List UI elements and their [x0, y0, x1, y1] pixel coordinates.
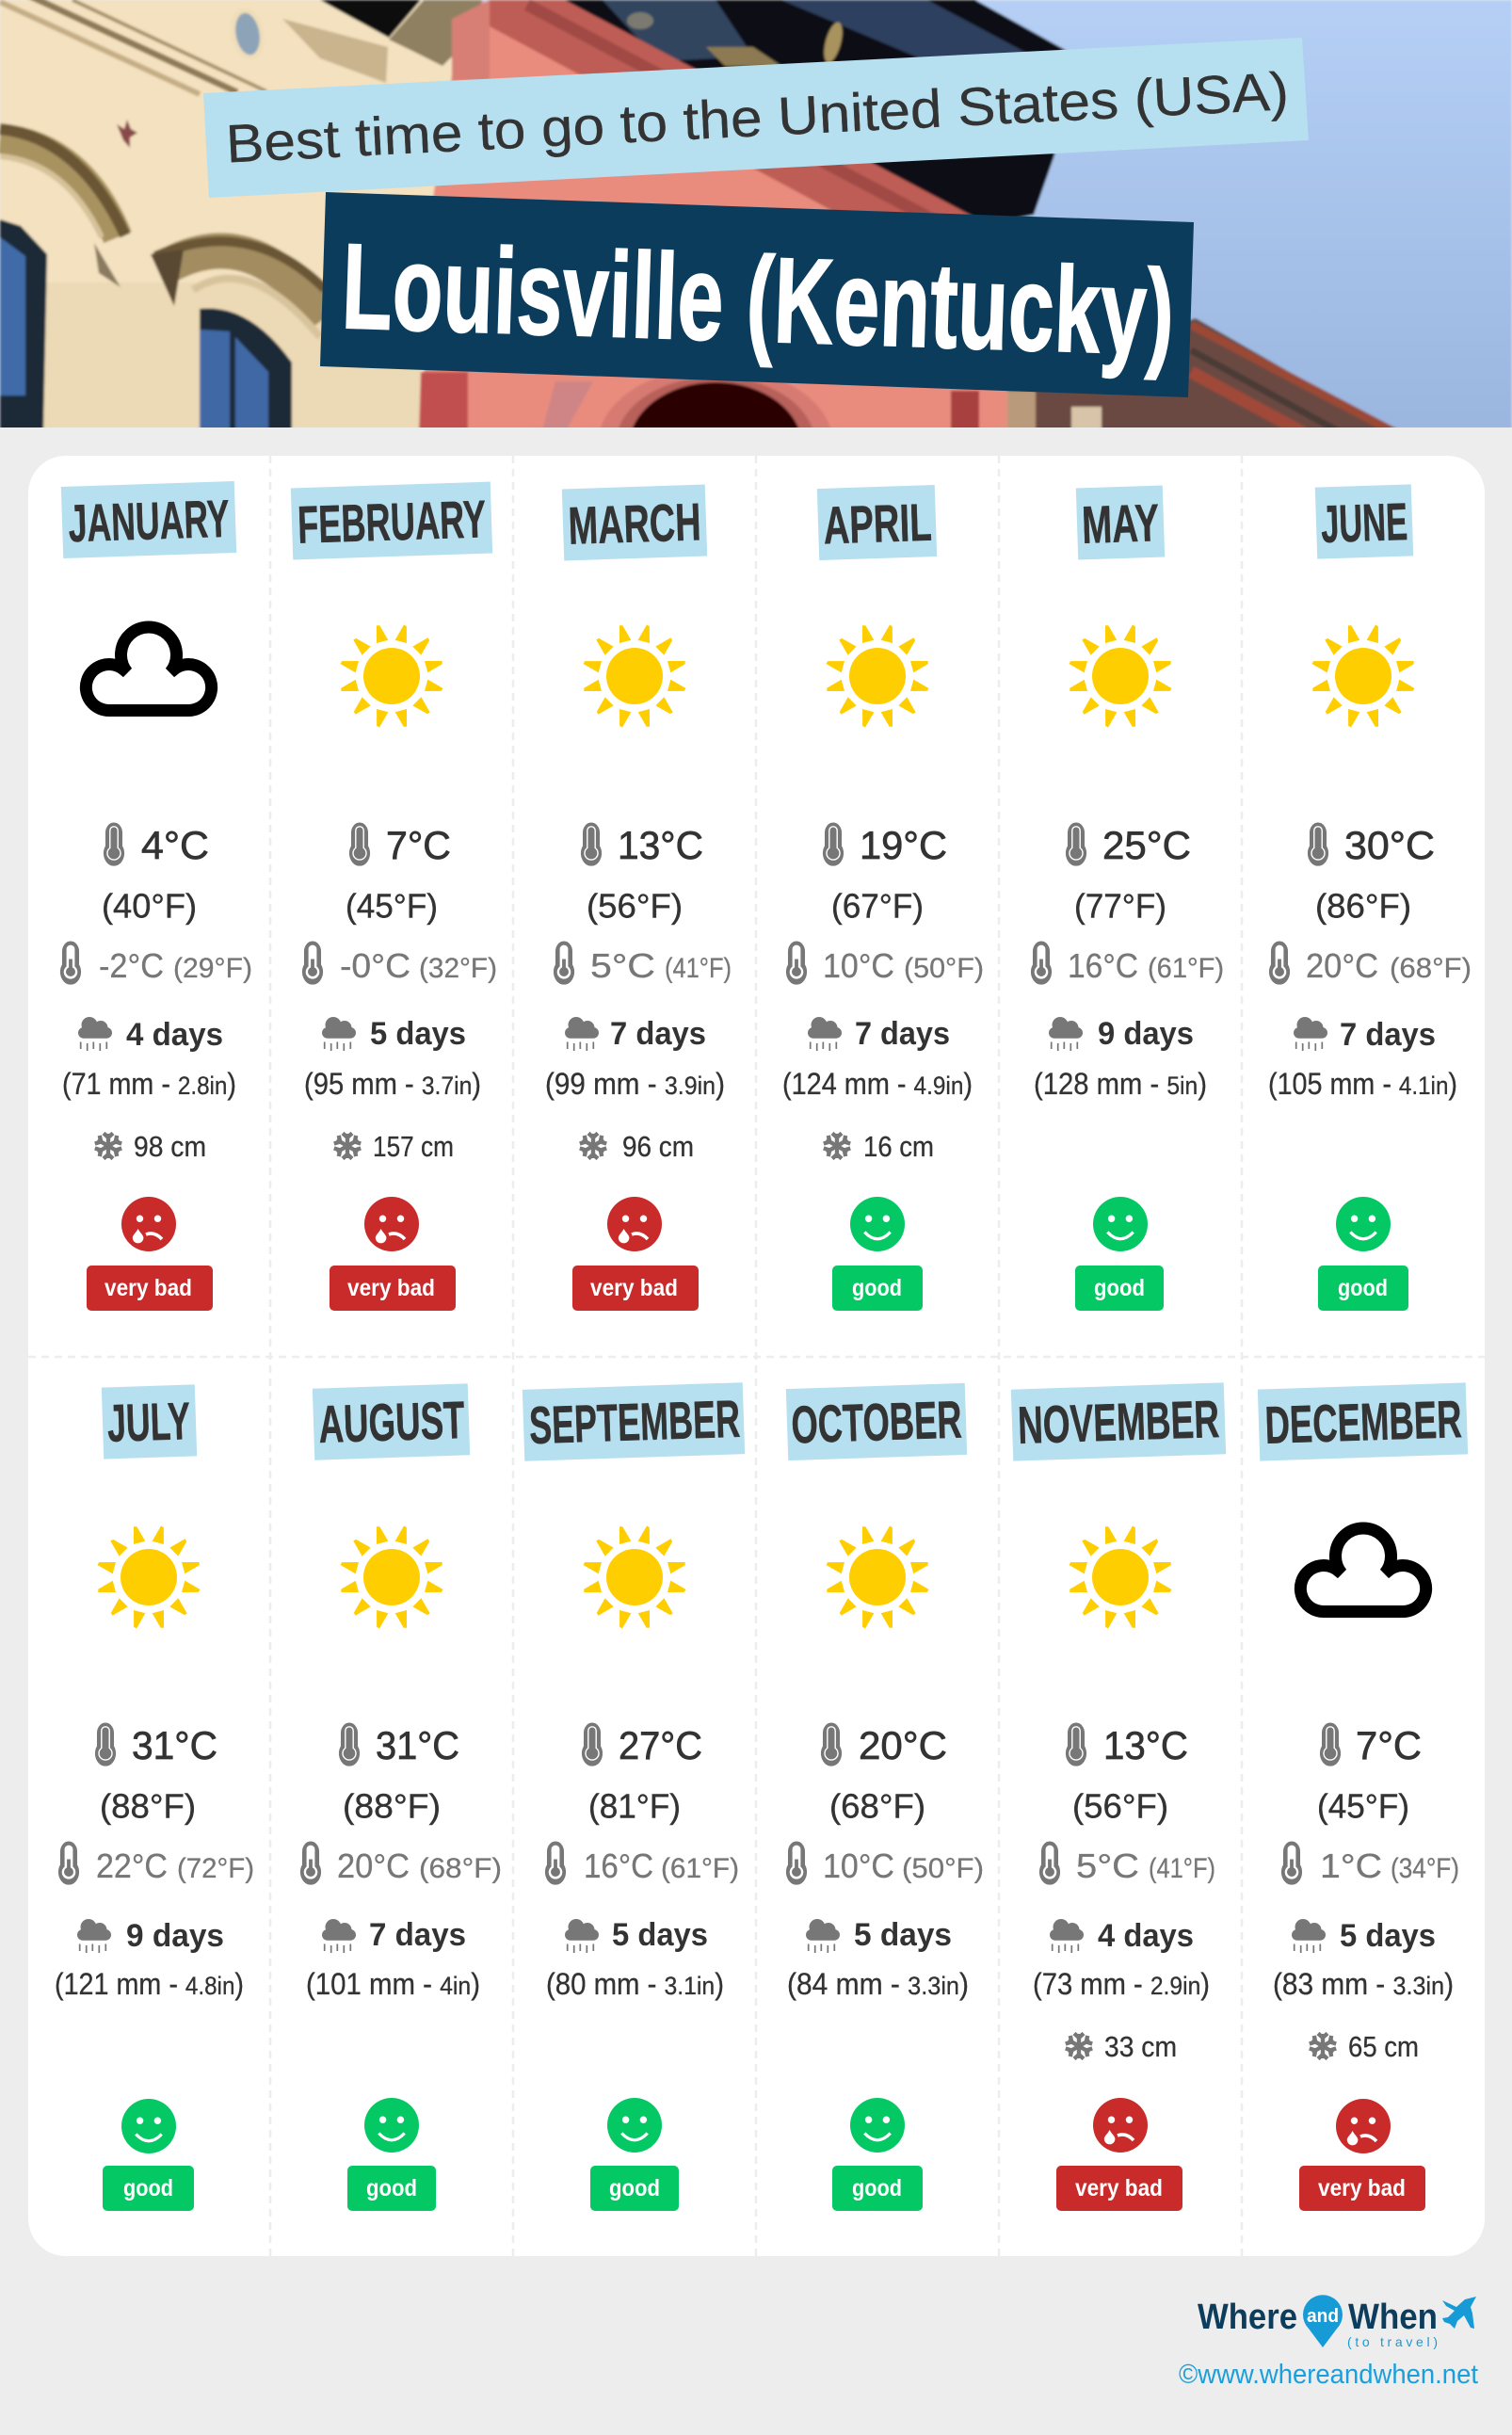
high temperature fahrenheit: (86°F): [1315, 887, 1411, 925]
high temperature fahrenheit: (77°F): [1074, 887, 1166, 925]
high temperature: 19°C: [860, 823, 947, 867]
icon: happy face: [1336, 1197, 1391, 1251]
precipitation: (84 mm - 3.3in): [787, 1967, 969, 2001]
precipitation: (83 mm - 3.3in): [1273, 1967, 1454, 2001]
rating badge: [832, 1266, 923, 1311]
high temperature: 30°C: [1344, 823, 1435, 867]
high temperature: 20°C: [859, 1723, 947, 1767]
high temperature: 4°C: [141, 823, 209, 867]
rating badge: good: [366, 2175, 417, 2201]
heading: November: NOVEMBER: [1017, 1389, 1220, 1455]
low temperature: 16°C: [584, 1846, 653, 1885]
low temperature: (29°F): [173, 953, 252, 984]
rating badge: very bad: [1318, 2175, 1406, 2201]
high temperature fahrenheit: (81°F): [588, 1787, 681, 1825]
high temperature fahrenheit: (68°F): [829, 1787, 925, 1825]
precipitation: (128 mm - 5in): [1034, 1067, 1207, 1101]
low temperature: (61°F): [1148, 953, 1224, 984]
low temperature: [1269, 942, 1472, 985]
low temperature: 20°C: [1306, 946, 1378, 985]
low temperature: (41°F): [665, 953, 732, 984]
low temperature: -0°C: [340, 946, 410, 985]
website credit: ©www.whereandwhen.net: [1179, 2360, 1478, 2390]
low temperature: (41°F): [1149, 1853, 1215, 1884]
high temperature: 13°C: [618, 823, 703, 867]
heading: May: MAY: [1081, 492, 1160, 555]
icon: sad face: [1336, 2099, 1391, 2153]
rating badge: [1056, 2166, 1182, 2211]
icon: sun: [826, 1525, 929, 1629]
heading: September: [523, 1382, 745, 1461]
heading: March: MARCH: [568, 492, 702, 556]
icon: happy face: [850, 2098, 905, 2153]
rating badge: [347, 2166, 436, 2211]
panel: April: [782, 485, 984, 1311]
icon: sun: [340, 1525, 443, 1629]
rating badge: [1299, 2166, 1425, 2211]
rating badge: good: [1338, 1275, 1388, 1301]
low temperature: [786, 942, 984, 985]
high temperature: [349, 823, 451, 867]
high temperature fahrenheit: (45°F): [1317, 1787, 1409, 1825]
rating badge: very bad: [105, 1275, 192, 1301]
low temperature: 1°C: [1320, 1846, 1382, 1885]
high temperature: 7°C: [1356, 1723, 1422, 1767]
high temperature: 27°C: [619, 1723, 702, 1767]
low temperature: [300, 1842, 502, 1885]
heading: October: OCTOBER: [791, 1390, 962, 1454]
precipitation: (71 mm - 2.8in): [62, 1067, 236, 1101]
low temperature: (34°F): [1391, 1853, 1459, 1884]
high temperature fahrenheit: (56°F): [1072, 1787, 1168, 1825]
snowfall: [95, 1130, 206, 1163]
low temperature: -2°C: [99, 946, 164, 985]
heading: November: [1011, 1382, 1226, 1461]
rainy days: 5 days: [612, 1917, 708, 1953]
precipitation: (105 mm - 4.1in): [1268, 1067, 1457, 1101]
high temperature: 31°C: [132, 1723, 217, 1767]
rating badge: [572, 1266, 699, 1311]
panel: September: [523, 1382, 745, 2211]
low temperature: (32°F): [419, 953, 497, 984]
snowfall: [1066, 2030, 1177, 2063]
rainy days: 7 days: [1340, 1017, 1436, 1053]
logo: Where and When: [1198, 2295, 1476, 2349]
snowfall: 98 cm: [134, 1130, 206, 1163]
snowfall: [824, 1130, 934, 1163]
rainy days: 7 days: [610, 1016, 706, 1052]
snowfall: 96 cm: [622, 1130, 694, 1163]
high temperature fahrenheit: (88°F): [100, 1787, 196, 1825]
panel: July: [55, 1384, 254, 2211]
rating badge: [103, 2166, 194, 2211]
rainy days: [1292, 1918, 1436, 1954]
rainy days: 9 days: [126, 1918, 224, 1954]
logo: Where and When: When: [1348, 2298, 1438, 2337]
low temperature: [554, 942, 732, 985]
high temperature: [581, 823, 703, 867]
icon: map pin: [1303, 2295, 1343, 2347]
rainy days: 5 days: [370, 1016, 466, 1052]
rainy days: 4 days: [1098, 1918, 1194, 1954]
rainy days: [565, 1917, 708, 1953]
rating badge: very bad: [1075, 2175, 1163, 2201]
heading: March: [562, 485, 707, 560]
rainy days: [808, 1016, 950, 1052]
low temperature: [1039, 1842, 1215, 1885]
low temperature: (50°F): [904, 953, 984, 984]
icon: cloud: [86, 627, 212, 711]
heading: July: [102, 1384, 197, 1459]
rainy days: [1049, 1016, 1194, 1052]
high temperature: [1320, 1723, 1422, 1767]
rainy days: [322, 1917, 466, 1953]
panel: October: [786, 1383, 984, 2211]
icon: happy face: [850, 1197, 905, 1251]
high temperature: [1066, 1723, 1188, 1767]
rating badge: good: [1094, 1275, 1145, 1301]
high temperature fahrenheit: (67°F): [831, 887, 924, 925]
precipitation: (80 mm - 3.1in): [546, 1967, 724, 2001]
panel: August: [300, 1383, 502, 2211]
icon: sun: [340, 624, 443, 728]
icon: sad face: [364, 1197, 419, 1251]
heading: September: SEPTEMBER: [528, 1389, 741, 1455]
low temperature: (50°F): [902, 1853, 984, 1884]
rating badge: [1318, 1266, 1408, 1311]
title: city banner: [320, 192, 1194, 397]
icon: sun: [1069, 1525, 1172, 1629]
logo: Where and When: Where: [1198, 2298, 1297, 2337]
heading: August: AUGUST: [318, 1390, 465, 1454]
rating badge: very bad: [590, 1275, 678, 1301]
precipitation: (99 mm - 3.9in): [545, 1067, 725, 1101]
icon: sad face: [1093, 2098, 1148, 2153]
rating badge: [590, 2166, 679, 2211]
rainy days: [77, 1918, 224, 1954]
heading: February: FEBRUARY: [297, 489, 487, 555]
low temperature: [302, 942, 497, 985]
rainy days: [322, 1016, 466, 1052]
high temperature: 7°C: [386, 823, 451, 867]
rainy days: 7 days: [855, 1016, 950, 1052]
rainy days: [1050, 1918, 1194, 1954]
low temperature: [60, 942, 252, 985]
panel: March: [545, 485, 732, 1311]
precipitation: (121 mm - 4.8in): [55, 1967, 244, 2001]
low temperature: 10°C: [823, 1846, 894, 1885]
precipitation: (124 mm - 4.9in): [782, 1067, 973, 1101]
heading: June: [1315, 484, 1413, 559]
rainy days: 5 days: [854, 1917, 952, 1953]
low temperature: [786, 1842, 984, 1885]
rainy days: [806, 1917, 952, 1953]
icon: cloud: [1300, 1528, 1426, 1612]
low temperature: 22°C: [96, 1846, 168, 1885]
logo: Where and When: (to travel): [1347, 2334, 1438, 2349]
rainy days: 7 days: [369, 1917, 466, 1953]
low temperature: [545, 1842, 739, 1885]
snowfall: 16 cm: [863, 1130, 934, 1163]
heading: April: APRIL: [823, 492, 933, 555]
high temperature: [582, 1723, 702, 1767]
rainy days: [78, 1017, 223, 1053]
rating badge: good: [852, 2175, 902, 2201]
heading: October: [786, 1383, 967, 1460]
rainy days: [1294, 1017, 1436, 1053]
precipitation: (101 mm - 4in): [306, 1967, 480, 2001]
heading: April: [817, 485, 937, 560]
snowfall: [334, 1130, 454, 1163]
icon: map pin: and: [1307, 2306, 1339, 2327]
heading: January: [61, 481, 236, 558]
rating badge: good: [609, 2175, 660, 2201]
high temperature: 31°C: [376, 1723, 459, 1767]
rating badge: good: [123, 2175, 173, 2201]
rating badge: [87, 1266, 213, 1311]
icon: sad face: [607, 1197, 662, 1251]
panel: December: [1258, 1382, 1468, 2211]
heading: February: [291, 482, 492, 559]
panel: January: [60, 481, 252, 1311]
rating badge: [1075, 1266, 1164, 1311]
low temperature: 20°C: [337, 1846, 410, 1885]
snowfall: [1310, 2030, 1419, 2063]
icon: sun: [583, 1525, 686, 1629]
panel: February: [291, 482, 497, 1311]
high temperature fahrenheit: (56°F): [587, 887, 683, 925]
snowfall: 65 cm: [1348, 2030, 1419, 2063]
low temperature: (68°F): [419, 1853, 502, 1884]
snowfall: 157 cm: [373, 1130, 454, 1163]
icon: sun: [826, 624, 929, 728]
icon: happy face: [1093, 1197, 1148, 1251]
low temperature: (72°F): [177, 1853, 254, 1884]
icon: sun: [1069, 624, 1172, 728]
panel: November: [1011, 1382, 1226, 2211]
rainy days: 4 days: [126, 1017, 223, 1053]
high temperature fahrenheit: (45°F): [346, 887, 438, 925]
panel: monthly climate card: [28, 456, 1485, 2256]
heading: May: [1076, 486, 1165, 559]
title: best time banner: Best time to go to the United States (USA): [224, 61, 1290, 174]
title: best time banner: [203, 38, 1309, 198]
icon: happy face: [364, 2098, 419, 2153]
header photo: historic building facade against blue sky: [0, 0, 1512, 522]
snowfall: [580, 1130, 694, 1163]
snowfall: 33 cm: [1104, 2030, 1177, 2063]
icon: sun: [1311, 624, 1415, 728]
low temperature: [58, 1842, 254, 1885]
precipitation: (95 mm - 3.7in): [304, 1067, 481, 1101]
icon: airplane: [1442, 2297, 1476, 2329]
rating badge: very bad: [347, 1275, 435, 1301]
rating badge: good: [852, 1275, 902, 1301]
high temperature: [1308, 823, 1435, 867]
precipitation: (73 mm - 2.9in): [1033, 1967, 1210, 2001]
heading: July: JULY: [106, 1391, 191, 1453]
heading: June: JUNE: [1320, 492, 1408, 554]
rainy days: 5 days: [1340, 1918, 1436, 1954]
panel: May: [1031, 486, 1224, 1311]
rating badge: [832, 2166, 923, 2211]
low temperature: 10°C: [823, 946, 894, 985]
low temperature: 16°C: [1068, 946, 1138, 985]
rainy days: 9 days: [1098, 1016, 1194, 1052]
high temperature: [95, 1723, 217, 1767]
high temperature fahrenheit: (88°F): [343, 1787, 441, 1825]
low temperature: [1281, 1842, 1459, 1885]
low temperature: 5°C: [1076, 1846, 1139, 1885]
icon: sun: [583, 624, 686, 728]
panel: June: [1268, 484, 1472, 1311]
high temperature: 25°C: [1102, 823, 1191, 867]
heading: August: [313, 1383, 470, 1460]
high temperature: 13°C: [1103, 1723, 1188, 1767]
icon: sun: [97, 1525, 201, 1629]
icon: sad face: [121, 1197, 176, 1251]
high temperature: [104, 823, 209, 867]
icon: happy face: [121, 2099, 176, 2153]
high temperature: [339, 1723, 459, 1767]
high temperature fahrenheit: (40°F): [102, 887, 197, 925]
heading: January: JANUARY: [68, 489, 231, 553]
icon: happy face: [607, 2098, 662, 2153]
rating badge: [330, 1266, 456, 1311]
low temperature: (61°F): [661, 1853, 739, 1884]
low temperature: 5°C: [590, 946, 655, 985]
rainy days: [565, 1016, 706, 1052]
low temperature: [1031, 942, 1224, 985]
low temperature: (68°F): [1390, 953, 1472, 984]
